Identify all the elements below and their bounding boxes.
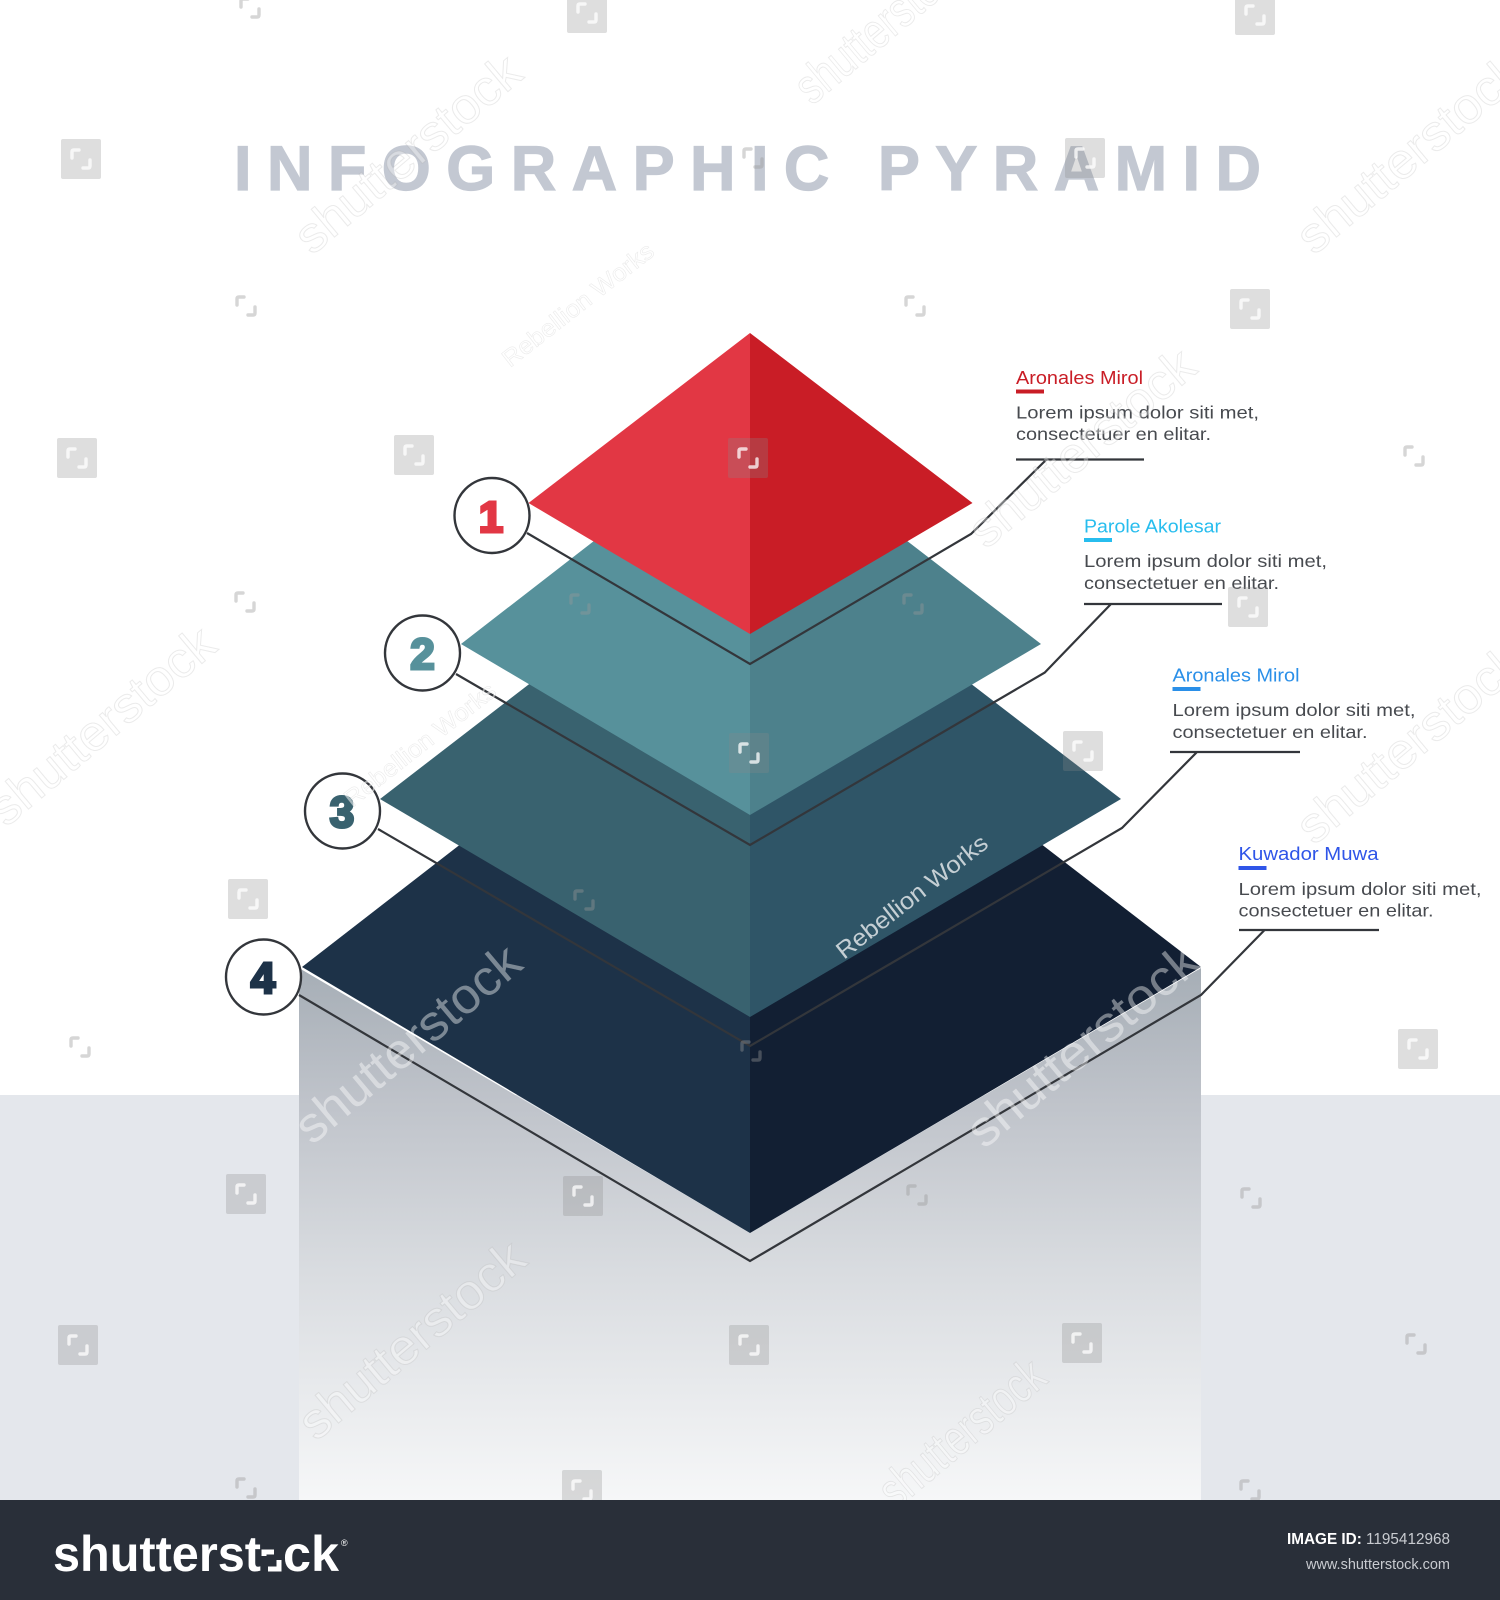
text block 4: Lorem ipsum dolor siti met, (1238, 879, 1482, 899)
watermark overlays: Rebellion Works (831, 830, 993, 965)
number badge 2 (385, 616, 460, 690)
number badge 4: 4 (251, 954, 276, 1003)
image id: IMAGE ID: 1195412968 (1287, 1531, 1450, 1548)
pyramid layer 2 (461, 420, 1041, 815)
number badge 1: 1 (479, 493, 503, 542)
pyramid layer 3 (380, 514, 1121, 1017)
number badge 4 (226, 940, 301, 1014)
leader line 2 (456, 604, 1222, 845)
leader line 1 (527, 460, 1144, 664)
text block 4: consectetuer en elitar. (1238, 900, 1434, 920)
number badge 3: 3 (330, 788, 354, 837)
footer logo: ® (341, 1538, 348, 1548)
text block 1: consectetuer en elitar. (1016, 424, 1211, 444)
watermark overlays: Rebellion Works (339, 678, 501, 813)
pyramid reflection column (299, 968, 1201, 1500)
text block 2: consectetuer en elitar. (1084, 573, 1279, 593)
leader line 3 (378, 752, 1300, 1046)
text block 3 (1172, 664, 1416, 742)
text block 2: Parole Akolesar (1084, 516, 1221, 536)
text block 4 (1238, 843, 1482, 920)
number badge 2: 2 (410, 630, 435, 679)
watermark overlays: shutterstock (283, 932, 533, 1154)
number badge 3 (305, 774, 380, 848)
watermark overlays: shutterstock (287, 1228, 537, 1450)
watermark overlays: Rebellion Works (497, 238, 659, 373)
pyramid layer 1 (528, 333, 972, 634)
text block 3: consectetuer en elitar. (1172, 722, 1368, 742)
background floor band (0, 1095, 1500, 1500)
website: www.shutterstock.com (1305, 1556, 1450, 1573)
watermark overlays: shutterstock (957, 336, 1207, 558)
text block 4: Kuwador Muwa (1238, 843, 1379, 864)
text block 2 (1084, 516, 1327, 593)
footer bar (0, 1500, 1500, 1600)
text block 1: Lorem ipsum dolor siti met, (1016, 402, 1259, 422)
text block 1 (1016, 367, 1259, 444)
watermark overlays: shutterstock (867, 1346, 1057, 1518)
title: INFOGRAPHIC PYRAMID (234, 134, 1261, 204)
pyramid layer 4 (302, 620, 1201, 1233)
text block 3: Lorem ipsum dolor siti met, (1172, 700, 1416, 720)
number badge 1 (454, 478, 530, 553)
leader line 4 (299, 930, 1379, 1261)
watermark overlays: shutterstock (955, 932, 1210, 1158)
watermark overlays: shutterstock (283, 42, 533, 264)
text block 2: Lorem ipsum dolor siti met, (1084, 551, 1327, 571)
footer logo: shutterst (53, 1526, 261, 1582)
footer logo: ck (283, 1526, 339, 1582)
text block 3: Aronales Mirol (1172, 664, 1300, 686)
text block 1: Aronales Mirol (1016, 367, 1143, 388)
